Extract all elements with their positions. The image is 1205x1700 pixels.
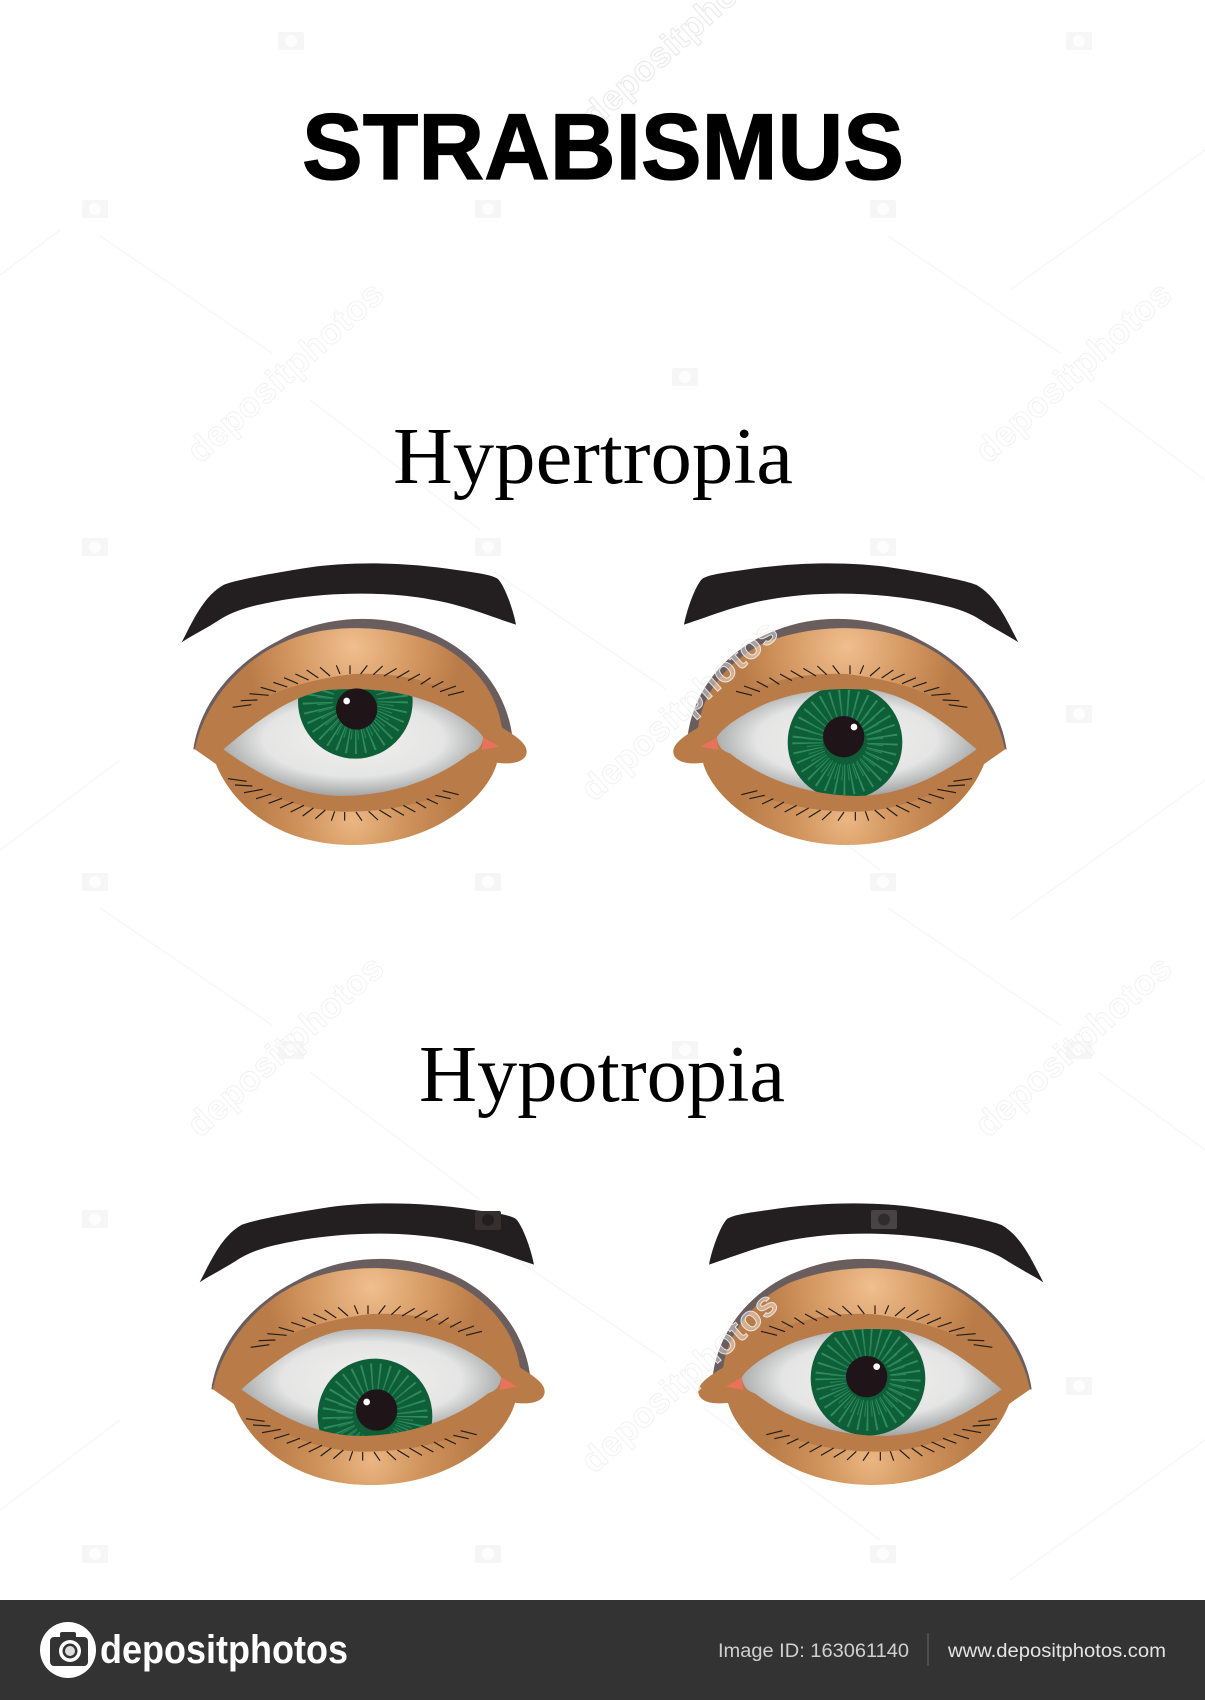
watermarks [179, 274, 1179, 1481]
watermarks: depositphotos [967, 274, 1179, 471]
eye: hypertropia right [673, 563, 1018, 845]
watermarks: depositphotos [179, 948, 391, 1145]
logo icon [40, 1622, 96, 1678]
title: STRABISMUS [302, 94, 904, 199]
footer divider [928, 1633, 929, 1666]
watermarks: depositphotos [179, 274, 391, 471]
watermarks: depositphotos [573, 612, 785, 809]
image id: Image ID: 163061140 [718, 1641, 909, 1662]
watermarks: depositphotos [967, 948, 1179, 1145]
camera icon on right brow [871, 1210, 897, 1229]
heading: hypertropia: Hypertropia [393, 411, 793, 501]
watermark camera icons [82, 32, 1092, 1563]
eye: hypotropia right [698, 1203, 1043, 1485]
heading: hypotropia: Hypotropia [419, 1029, 785, 1119]
watermarks: depositphotos [573, 1284, 785, 1481]
logo wordmark: depositphotos [100, 1628, 348, 1672]
camera icon on left brow [475, 1211, 501, 1230]
footer bar [0, 1600, 1205, 1700]
eye: hypertropia left [182, 563, 527, 845]
eye: hypotropia left [200, 1203, 545, 1485]
website: www.depositphotos.com [947, 1641, 1166, 1662]
